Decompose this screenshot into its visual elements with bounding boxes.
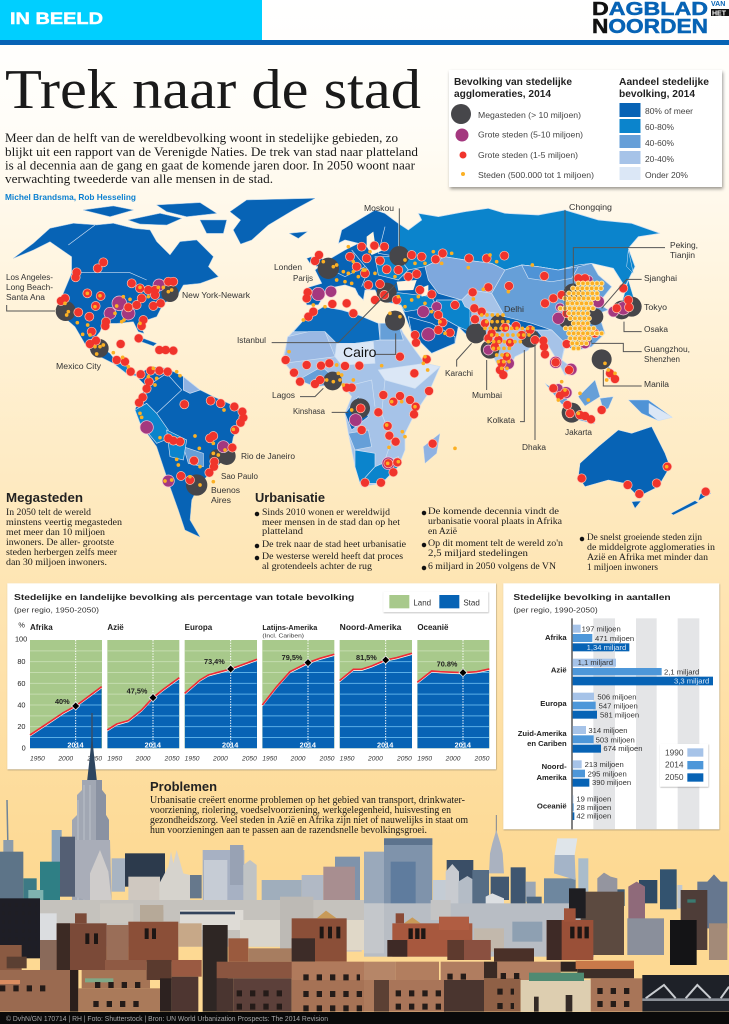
newspaper logo: VAN (711, 1, 725, 8)
Africa (283, 307, 440, 487)
legend: population and urban share: 40-60% (645, 138, 675, 148)
bars: Afrika: 197 miljoen (582, 625, 621, 634)
city labels: New York-Newark (182, 291, 251, 300)
legend: population and urban share: 20-40% (645, 154, 675, 164)
text block: Urbanisatie: meer mensen in de stad dan op het (262, 517, 400, 528)
text block: Urbanisatie: 2,5 miljard stedelingen (428, 548, 528, 559)
city labels: Karachi (445, 369, 473, 378)
text block: Megasteden (6, 490, 122, 568)
newspaper logo: HET (712, 10, 727, 18)
bars: Afrika: Afrika (545, 633, 567, 642)
bars: Oceanië: 42 miljoen (576, 812, 611, 821)
chart legend: Stad (463, 598, 480, 607)
city labels: Shenzhen (644, 355, 680, 364)
chart: Afrika (30, 623, 102, 763)
midground pale buildings (0, 897, 727, 960)
text block: Problemen (150, 779, 468, 836)
chart: Latijns-Amerika: 79,5% (282, 653, 303, 662)
y axis (15, 621, 27, 753)
city labels: Dhaka (522, 443, 547, 452)
chart: Oceanië: 2000 (445, 756, 461, 763)
legend: population and urban share: Grote steden (5-10 miljoen) (478, 130, 583, 140)
chart: Europa: 2000 (212, 756, 228, 763)
header bar (0, 0, 729, 45)
bars: Noord-Amerika: Noord- (542, 762, 567, 771)
legend: population and urban share: bevolking, 2014 (619, 89, 695, 100)
bars: Azië: Azië (551, 666, 567, 675)
legend: population and urban share: agglomeraties, 2014 (454, 89, 551, 100)
chart: Latijns-Amerika: 1950 (262, 756, 277, 763)
bars: Noord-Amerika (536, 760, 631, 787)
chart: Noord-Amerika: 2000 (367, 756, 383, 763)
bars: Noord-Amerika: 295 miljoen (588, 769, 627, 778)
bars: Europa: 547 miljoen (599, 701, 638, 710)
y axis: 100 (15, 634, 27, 643)
chart: Azië: 2014 (145, 741, 162, 750)
year legend: 1990 (665, 748, 684, 758)
panel: urban and rural share chart: (per regio, 1950-2050) (14, 607, 99, 614)
text block: Megasteden: minstens veertig megasteden (6, 517, 122, 528)
bars: Azië: 3,3 miljard (674, 676, 709, 685)
chart: Latijns-Amerika: Latijns-Amerika (262, 625, 317, 632)
text block: Urbanisatie: De westerse wereld heeft dat proces (262, 551, 403, 562)
chart: Latijns-Amerika: (Incl. Cariben) (262, 633, 304, 639)
Asia-Pacific islands and Australia (307, 250, 711, 515)
bars: Oceanië (537, 794, 611, 821)
bars: Europa: Europa (540, 699, 567, 708)
bars: Noord-Amerika: 390 miljoen (592, 778, 631, 787)
text block: Urbanisatie: al grotendeels achter de rug (262, 561, 372, 572)
city labels: Santa Ana (6, 293, 46, 302)
bars: Oceanië: Oceanië (537, 801, 567, 810)
chart: Latijns-Amerika (262, 625, 335, 763)
bars: Zuid-Amerika en Cariben: en Cariben (527, 739, 567, 748)
chart: Azië: 1950 (107, 756, 122, 763)
intro text: verwachting tweederde van alle mensen in de stad. (5, 171, 273, 186)
city labels: Aires (211, 496, 231, 505)
city markers (500,000 to 1 million) (65, 247, 667, 485)
city labels: Peking, (670, 241, 698, 250)
chart: Oceanië (417, 623, 490, 763)
chart: Oceanië: 1950 (417, 756, 432, 763)
legend: population and urban share (449, 70, 722, 187)
newspaper logo (592, 0, 729, 38)
bars: Afrika (545, 625, 634, 652)
chart: Europa (185, 623, 257, 763)
bars: Europa: 581 miljoen (600, 710, 639, 719)
text block: Problemen: hun voorzieningen aan te passen aan de razendsnelle bevolkingsgroei. (150, 825, 427, 836)
city labels: Long Beach- (6, 283, 53, 292)
chart: Noord-Amerika: 2050 (396, 756, 412, 763)
Madagascar (423, 433, 440, 463)
Americas and Greenland landmass (13, 198, 315, 537)
city labels: Los Angeles- (6, 273, 53, 282)
intro text (5, 130, 419, 186)
city labels: Guangzhou, (644, 345, 690, 354)
background towers, left half (0, 830, 362, 952)
panel: urban and rural share chart (7, 583, 496, 769)
bars: Zuid-Amerika en Cariben: 503 miljoen (596, 735, 635, 744)
foreground brick buildings, left half (0, 898, 364, 1012)
city labels: Chongqing (569, 203, 612, 212)
bars: Zuid-Amerika en Cariben: 674 miljoen (603, 744, 642, 753)
chart legend: Land (413, 598, 431, 607)
chart legend (383, 592, 488, 612)
city labels: Osaka (644, 325, 669, 334)
city labels: Sao Paulo (221, 472, 259, 481)
panel: urban and rural share chart: Stedelijke en landelijke bevolking als percentage van totale bevolking (14, 593, 354, 602)
y axis: 60 (17, 679, 25, 688)
text block: Problemen: gezondheidszorg. Veel steden in Azië en Afrika zijn niet of nauwelijks in staat om (150, 815, 468, 826)
text block: Urbanisatie: Sinds 2010 wonen er wereldwijd (262, 507, 390, 518)
footer credits (0, 1012, 729, 1024)
city labels: Mexico City (56, 362, 101, 371)
city labels: Kolkata (487, 416, 516, 425)
text block: Megasteden: Megasteden (6, 490, 83, 505)
city labels: Sjanghai (644, 274, 677, 283)
text block: Problemen: Problemen (150, 779, 217, 794)
chart: Latijns-Amerika: 2014 (300, 741, 317, 750)
city labels: Tianjin (670, 251, 695, 260)
bars: Azië (551, 658, 713, 685)
city labels: Mumbai (472, 391, 502, 400)
legend: population and urban share: 80% of meer (645, 106, 693, 116)
chart: Noord-Amerika: 2014 (377, 741, 394, 750)
city labels (6, 203, 698, 505)
city labels: Manila (644, 380, 670, 389)
city labels: Buenos (211, 486, 240, 495)
text block: Megasteden: steden herbergen zelfs meer (6, 547, 118, 558)
leader lines for city labels (7, 208, 665, 440)
text block: Problemen: Urbanisatie creëert enorme problemen op het gebied van transport, drinkwater- (150, 795, 465, 806)
text block: Urbanisatie: Op dit moment telt de wereld zo'n (428, 538, 563, 549)
city labels: Kinshasa (293, 407, 326, 416)
bars: Zuid-Amerika en Cariben: Zuid-Amerika (518, 729, 567, 738)
skyline illustration (0, 713, 729, 1012)
chart: Noord-Amerika: 81,5% (356, 653, 377, 662)
text block: Urbanisatie: platteland (262, 526, 303, 537)
chart: Afrika: 2014 (67, 741, 85, 750)
year legend: 2050 (665, 772, 684, 782)
text block: Problemen: voorziening, riolering, voedselvoorziening, werkgelegenheid, huisvesting en (150, 805, 451, 816)
byline: Michel Brandsma, Rob Hesseling (5, 192, 136, 202)
city labels: Jakarta (565, 428, 593, 437)
chart: Noord-Amerika: 1950 (340, 756, 355, 763)
y axis: 0 (22, 744, 26, 753)
chart: Azië: 2050 (164, 756, 180, 763)
chart: Latijns-Amerika: 2000 (290, 756, 306, 763)
chart: Azië: Azië (107, 623, 124, 632)
chart: Afrika: 1950 (30, 756, 45, 763)
chart: Azië: 2000 (135, 756, 151, 763)
text block: Urbanisatie: Azië en Afrika met minder dan (587, 552, 708, 563)
footer credits: © DvhN/GN 170714 | RH | Foto: Shutterstock | Bron: UN World Urbanization Prospects: The 2014 Revision (6, 1014, 328, 1023)
text block: Urbanisatie: De snelst groeiende steden zijn (587, 532, 702, 543)
city labels: Cairo (343, 344, 377, 360)
legend: population and urban share: Aandeel stedelijke (619, 77, 709, 88)
newspaper logo: NOORDEN (592, 16, 708, 38)
bars: Afrika: 471 miljoen (595, 634, 634, 643)
chart: Oceanië: Oceanië (417, 623, 449, 632)
text block: Urbanisatie: Urbanisatie (255, 490, 325, 505)
city labels: Londen (274, 263, 302, 272)
panel: urban population in numbers (503, 583, 719, 829)
legend: population and urban share: Megasteden (> 10 miljoen) (478, 110, 581, 120)
text block: Urbanisatie: 1 miljoen inwoners (587, 562, 658, 573)
chart: Afrika: 40% (55, 697, 70, 706)
bars: Azië: 1,1 miljard (578, 658, 613, 667)
legend: population and urban share: Bevolking van stedelijke (454, 77, 572, 88)
bars: Noord-Amerika: Amerika (536, 773, 567, 782)
title: Trek naar de stad (5, 59, 421, 121)
chart: Europa: Europa (185, 623, 213, 632)
far left tower spire (7, 800, 8, 852)
large city markers (5-10 million) (104, 275, 630, 487)
chart: Oceanië: 2014 (455, 741, 472, 750)
chart: Latijns-Amerika: 2050 (319, 756, 335, 763)
text block: Megasteden: In 2050 telt de wereld (6, 507, 91, 518)
chart: Afrika: 2000 (57, 756, 73, 763)
megacity markers (over 10 million) (56, 246, 642, 496)
chart: Noord-Amerika: Noord-Amerika (340, 623, 402, 632)
panel: urban population in numbers: Stedelijke bevolking in aantallen (513, 593, 671, 602)
bars: Europa (540, 692, 639, 719)
y axis: % (18, 621, 25, 630)
text block: Megasteden: inwoners. De aller- grootste (6, 537, 115, 548)
background towers, right half (364, 815, 727, 928)
text block: Megasteden: dan 30 miljoen inwoners. (6, 557, 107, 568)
city markers (1-5 million) (61, 246, 706, 494)
y axis: 20 (17, 722, 25, 731)
legend: population and urban share: 60-80% (645, 122, 675, 132)
world map (7, 198, 711, 537)
bars: Oceanië: 28 miljoen (576, 803, 611, 812)
bars: Azië: 2,1 miljard (664, 667, 699, 676)
inland seas (367, 232, 428, 297)
foreground brick buildings, right half (364, 888, 729, 1012)
intro text: Meer dan de helft van de wereldbevolking woont in stedelijke gebieden, zo (5, 130, 398, 145)
header bar: IN BEELD (10, 9, 103, 28)
Eurasia (303, 208, 660, 377)
text block: Urbanisatie: de middelgrote agglomeraties in (587, 542, 715, 553)
text block: Urbanisatie: 6 miljard in 2050 volgens de VN (428, 561, 556, 572)
panel: urban population in numbers: (per regio, 1990-2050) (513, 607, 598, 614)
city labels: Delhi (504, 305, 524, 314)
chart: Afrika: Afrika (30, 623, 53, 632)
chart: Noord-Amerika (340, 623, 412, 763)
bars: Zuid-Amerika en Cariben (518, 726, 642, 753)
bars: Noord-Amerika: 213 miljoen (585, 760, 624, 769)
bars: Europa: 506 miljoen (597, 692, 636, 701)
text block: Urbanisatie: De komende decennia vindt de (428, 506, 560, 517)
intro text: is al decennia aan de gang en gaat de komende jaren door. In 2050 woont naar (5, 158, 416, 172)
chart: Oceanië: 70.8% (437, 660, 458, 669)
year legend: 2014 (665, 760, 684, 770)
Empire State Building (72, 713, 109, 905)
intro text: blijkt uit een rapport van de Verenigde Naties. De trek van stad naar platteland (5, 144, 419, 159)
chart: Europa: 73,4% (204, 657, 225, 666)
chart: Europa: 2050 (241, 756, 257, 763)
bars: Afrika: 1,34 miljard (587, 643, 626, 652)
bars: Oceanië: 19 miljoen (576, 794, 611, 803)
South America lighter countries (68, 225, 203, 467)
year legend (660, 744, 708, 787)
text block: Urbanisatie: De trek naar de stad heet urbanisatie (262, 539, 407, 550)
legend: population and urban share: Grote steden (1-5 miljoen) (478, 150, 578, 160)
city labels: Tokyo (644, 303, 668, 312)
text block: Urbanisatie: en Azië (428, 526, 458, 537)
text block: Urbanisatie: urbanisatie vooral plaats in Afrika (428, 516, 563, 527)
text block: Megasteden: met meer dan 10 miljoen (6, 527, 105, 538)
y axis: 80 (17, 657, 25, 666)
y axis: 40 (17, 700, 25, 709)
chart: Oceanië: 2050 (474, 756, 490, 763)
city labels: Rio de Janeiro (241, 452, 296, 461)
chart: Azië: 47,5% (127, 686, 148, 695)
city labels: Moskou (364, 204, 394, 213)
legend: population and urban share: Steden (500.000 tot 1 miljoen) (478, 170, 594, 180)
city labels: Lagos (272, 391, 295, 400)
chart: Azië (107, 623, 180, 763)
city labels: Istanbul (237, 336, 266, 345)
city labels: Parijs (293, 274, 313, 283)
text block: Urbanisatie (255, 490, 715, 573)
chart: Europa: 2014 (222, 741, 239, 750)
chart: Europa: 1950 (185, 756, 200, 763)
bars: Zuid-Amerika en Cariben: 314 miljoen (588, 726, 627, 735)
legend: population and urban share: Onder 20% (645, 170, 689, 180)
chart: Afrika: 2050 (86, 756, 102, 763)
